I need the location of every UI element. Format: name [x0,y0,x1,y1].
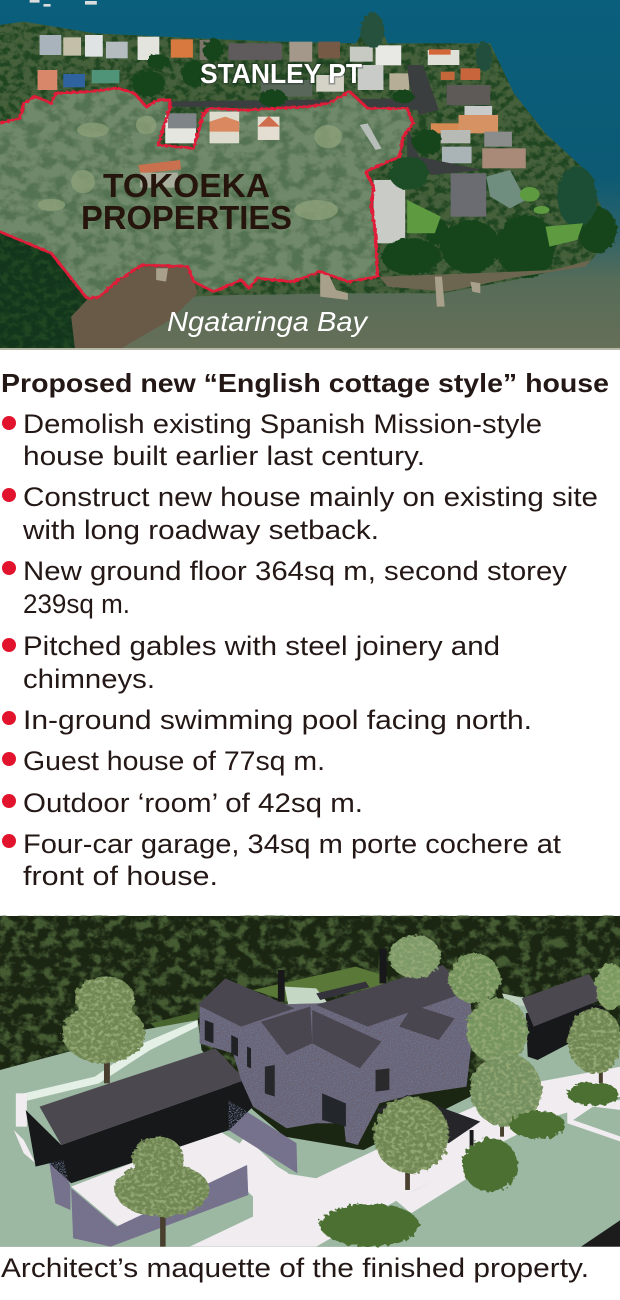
main house brick body [47,990,478,1247]
aerial photo: Stanley Point and Tokoeka properties [0,0,620,350]
bullet: guest house: Guest house of 77sq m. [23,746,325,776]
shore rocks [379,260,591,292]
bullet: garage: front of house. [23,861,218,891]
yachts [30,0,97,7]
maquette photo [0,916,620,1248]
bullet: garage [2,829,562,891]
bullet: demolish: house built earlier last century. [23,441,425,471]
bullet: demolish [2,409,542,471]
bullet: floor areas: New ground floor 364sq m, second storey [23,556,568,586]
bullet: floor areas: 239sq m. [23,589,130,619]
houses along Stanley Point shoreline [38,35,526,243]
bullet: demolish: Demolish existing Spanish Mission-style [23,409,542,439]
mudflat [71,267,198,350]
label: Tokoeka Properties [81,167,292,236]
label: Ngataringa Bay: Ngataringa Bay [167,306,369,337]
heading: Proposed new “English cottage style” house [1,368,609,398]
road [150,65,482,175]
bottom photo edge [0,348,620,350]
bullet: pool: In-ground swimming pool facing north. [23,705,532,735]
green model base [0,997,620,1247]
text panel: proposed house details [1,368,609,891]
sea and bay [0,0,620,350]
bullet: construct [2,482,598,545]
white pathways and courtyard [14,1020,620,1247]
Tokoeka land shaded area [0,87,419,300]
red property boundary [0,88,413,298]
hedge background [0,916,620,1247]
chimneys [278,948,387,1002]
bullet: construct: with long roadway setback. [22,515,379,545]
lower left forest [0,230,91,350]
guest house [522,974,605,1060]
bullet: outdoor room: Outdoor ‘room’ of 42sq m. [23,788,363,818]
dark native trees on the headland [132,13,617,278]
trees [59,933,620,1247]
model corner [581,1220,620,1247]
bullet: gables: chimneys. [23,664,155,694]
porte cochere [376,1095,480,1143]
garden lawns on headland [407,187,583,247]
bullet: gables: Pitched gables with steel joinery and [23,631,500,661]
label: Tokoeka Properties: TOKOEKA [103,167,270,204]
garage roof [40,1048,245,1145]
bullet: gables [2,631,500,694]
garage low brick walls [49,1100,297,1247]
bullet: floor areas [2,556,568,619]
house roofs [198,965,468,1068]
houses inside the boundary [138,112,381,188]
peninsula land [0,12,602,300]
bullet: garage: Four-car garage, 34sq m porte cochere at [23,829,562,859]
caption: Architect’s maquette of the finished property. [1,1253,589,1283]
bullet: construct: Construct new house mainly on existing site [23,482,598,512]
label: Stanley Pt: STANLEY PT [200,58,362,89]
garage black wall [26,1080,253,1183]
label: Tokoeka Properties: PROPERTIES [81,199,292,236]
jetties [156,268,480,307]
